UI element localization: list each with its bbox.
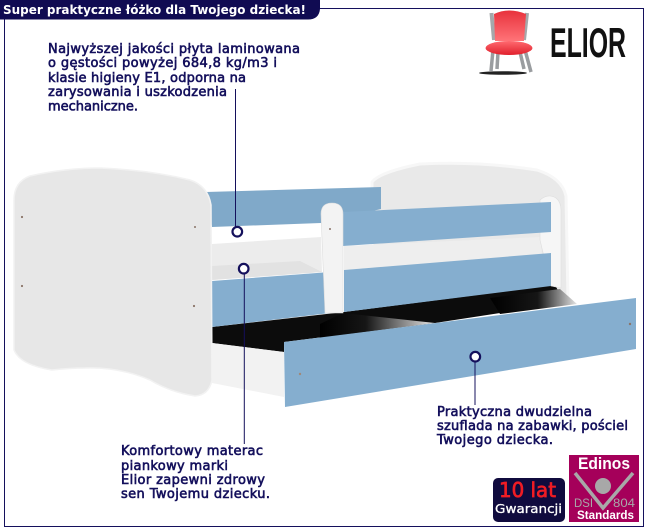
text block: mattress: sen Twojemu dziecku. <box>121 487 270 502</box>
right headboard <box>372 163 568 305</box>
upper front rail <box>343 202 551 246</box>
badge: Edinos standards: Edinos <box>578 454 630 473</box>
text block: drawer <box>436 405 628 448</box>
text block: drawer: Praktyczna dwudzielna <box>437 405 592 420</box>
left headboard <box>14 168 212 396</box>
text block: drawer: Twojego dziecka. <box>436 433 553 448</box>
text block: board: zarysowania i uszkodzenia <box>48 85 227 100</box>
callout: drawer <box>436 352 628 448</box>
bed illustration <box>14 163 636 407</box>
guard post: left <box>321 203 343 313</box>
badge: 10 year warranty <box>493 478 565 522</box>
text block: board: klasie higieny E1, odporna na <box>48 71 246 86</box>
text block: board <box>48 42 300 114</box>
under-bed shadow <box>212 285 577 352</box>
white base panel <box>212 343 284 397</box>
text block: mattress <box>121 444 270 502</box>
back rail <box>206 187 381 227</box>
leader line and marker: mattress <box>239 264 248 444</box>
leader line and marker: board <box>232 89 242 236</box>
badge: Edinos standards <box>569 454 639 522</box>
text block: board: Najwyższej jakości płyta laminowana <box>48 42 300 57</box>
badge: 10 year warranty: Gwarancji <box>495 502 562 516</box>
text block: board: o gęstości powyżej 684,8 kg/m3 i <box>48 56 277 71</box>
lower front rail <box>212 253 551 327</box>
leader line and marker: drawer <box>470 352 480 405</box>
guard post: right <box>540 196 561 288</box>
text block: mattress: Komfortowy materac <box>121 444 263 459</box>
badge: 10 year warranty: 10 lat <box>499 478 556 502</box>
logo: Elior <box>479 10 626 75</box>
badge: Edinos standards: 804 <box>613 496 635 510</box>
badge: Edinos standards: DSI <box>574 496 593 510</box>
drawer <box>284 298 636 407</box>
badge: Edinos standards: Standards <box>577 508 634 522</box>
callout: laminated board <box>48 42 300 236</box>
header banner: Super praktyczne łóżko dla Twojego dziecka! <box>3 2 306 17</box>
text block: mattress: Elior zapewni zdrowy <box>121 473 265 488</box>
callout: mattress <box>121 264 270 502</box>
text block: mattress: piankowy marki <box>121 459 228 474</box>
icon: red chair <box>479 10 532 75</box>
mattress <box>212 237 542 280</box>
text block: board: mechaniczne. <box>48 100 138 114</box>
icon: V and circle mark <box>575 473 633 508</box>
text block: drawer: szuflada na zabawki, pościel <box>437 419 628 434</box>
